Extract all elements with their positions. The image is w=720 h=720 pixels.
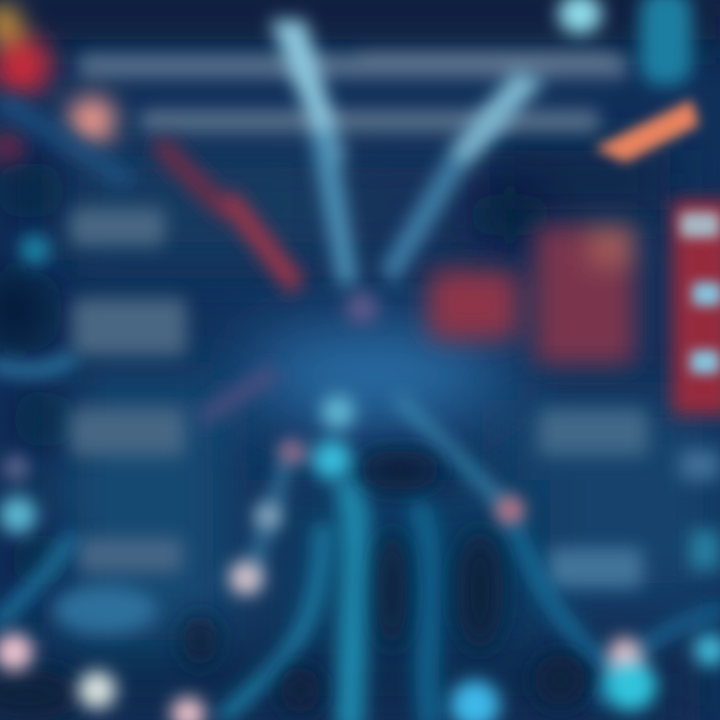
top heading: blurred title lines [78, 52, 628, 132]
left column panels [53, 208, 187, 634]
dark gaps between lines [0, 450, 586, 720]
dark gaps [0, 160, 540, 590]
centre node [346, 292, 378, 324]
top right cyan bar and orange arrow tip [558, 0, 692, 156]
top left corner accent [0, 6, 116, 161]
light beams converging at the centre [0, 20, 545, 425]
right centre red panel [428, 225, 635, 365]
glowing network nodes [0, 235, 720, 720]
flowing network lines [0, 360, 720, 720]
central glow [240, 333, 510, 417]
far right red panel with icons [672, 200, 720, 415]
lower right panels [538, 408, 720, 588]
